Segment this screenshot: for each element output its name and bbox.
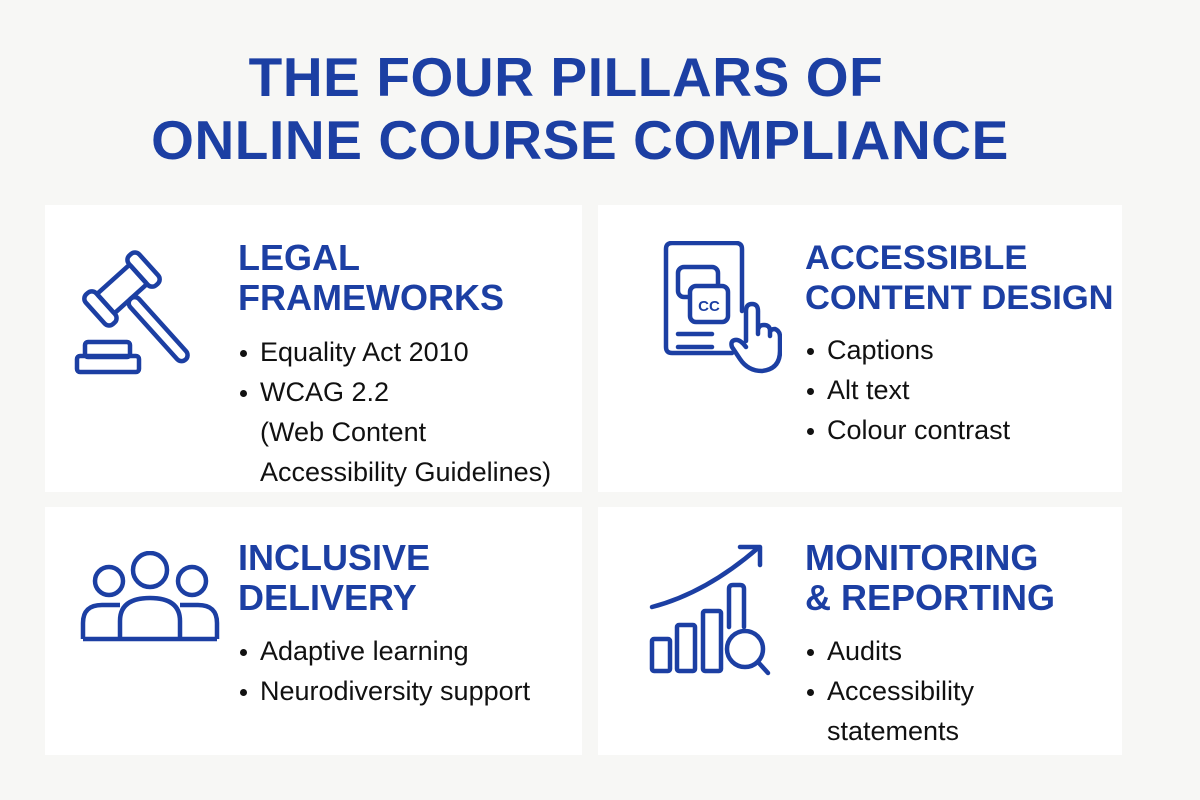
heading: DELIVERY [238, 577, 417, 618]
icon: captions document with hand [664, 241, 782, 374]
bullets: WCAG 2.2 [260, 377, 389, 407]
heading: & REPORTING [805, 577, 1055, 618]
icon: people group [80, 551, 220, 642]
panel: legal frameworks [45, 205, 582, 492]
heading: CONTENT DESIGN [805, 279, 1114, 317]
bullets: statements [827, 716, 959, 746]
bullets: Neurodiversity support [260, 676, 530, 706]
bullets: Equality Act 2010 [260, 337, 469, 367]
bullets: Audits [827, 636, 902, 666]
bullets [807, 636, 974, 746]
bullets: Adaptive learning [260, 636, 469, 666]
panel: monitoring & reporting [598, 507, 1122, 755]
title [151, 46, 1009, 171]
heading: MONITORING [805, 537, 1038, 578]
heading [238, 237, 504, 318]
bullets: (Web Content [260, 417, 426, 447]
heading: LEGAL [238, 237, 360, 278]
heading [805, 537, 1055, 618]
bullets: Accessibility Guidelines) [260, 457, 551, 487]
icon: captions document with hand: CC [698, 298, 720, 315]
heading [805, 239, 1114, 317]
bullets: Colour contrast [827, 415, 1010, 445]
panel: inclusive delivery [45, 507, 582, 755]
icon: gavel [74, 250, 190, 374]
title: THE FOUR PILLARS OF [249, 46, 883, 108]
bullets: Alt text [827, 375, 910, 405]
panel: accessible content design [598, 205, 1122, 492]
bullets: Captions [827, 335, 934, 365]
title: ONLINE COURSE COMPLIANCE [151, 109, 1009, 171]
bullets: Accessibility [827, 676, 974, 706]
heading: INCLUSIVE [238, 537, 430, 578]
heading [238, 537, 430, 618]
icon: chart with magnifier [650, 544, 770, 676]
heading: ACCESSIBLE [805, 239, 1027, 277]
bullets [240, 337, 551, 487]
bullets [240, 636, 530, 706]
bullets [807, 335, 1010, 445]
heading: FRAMEWORKS [238, 277, 504, 318]
